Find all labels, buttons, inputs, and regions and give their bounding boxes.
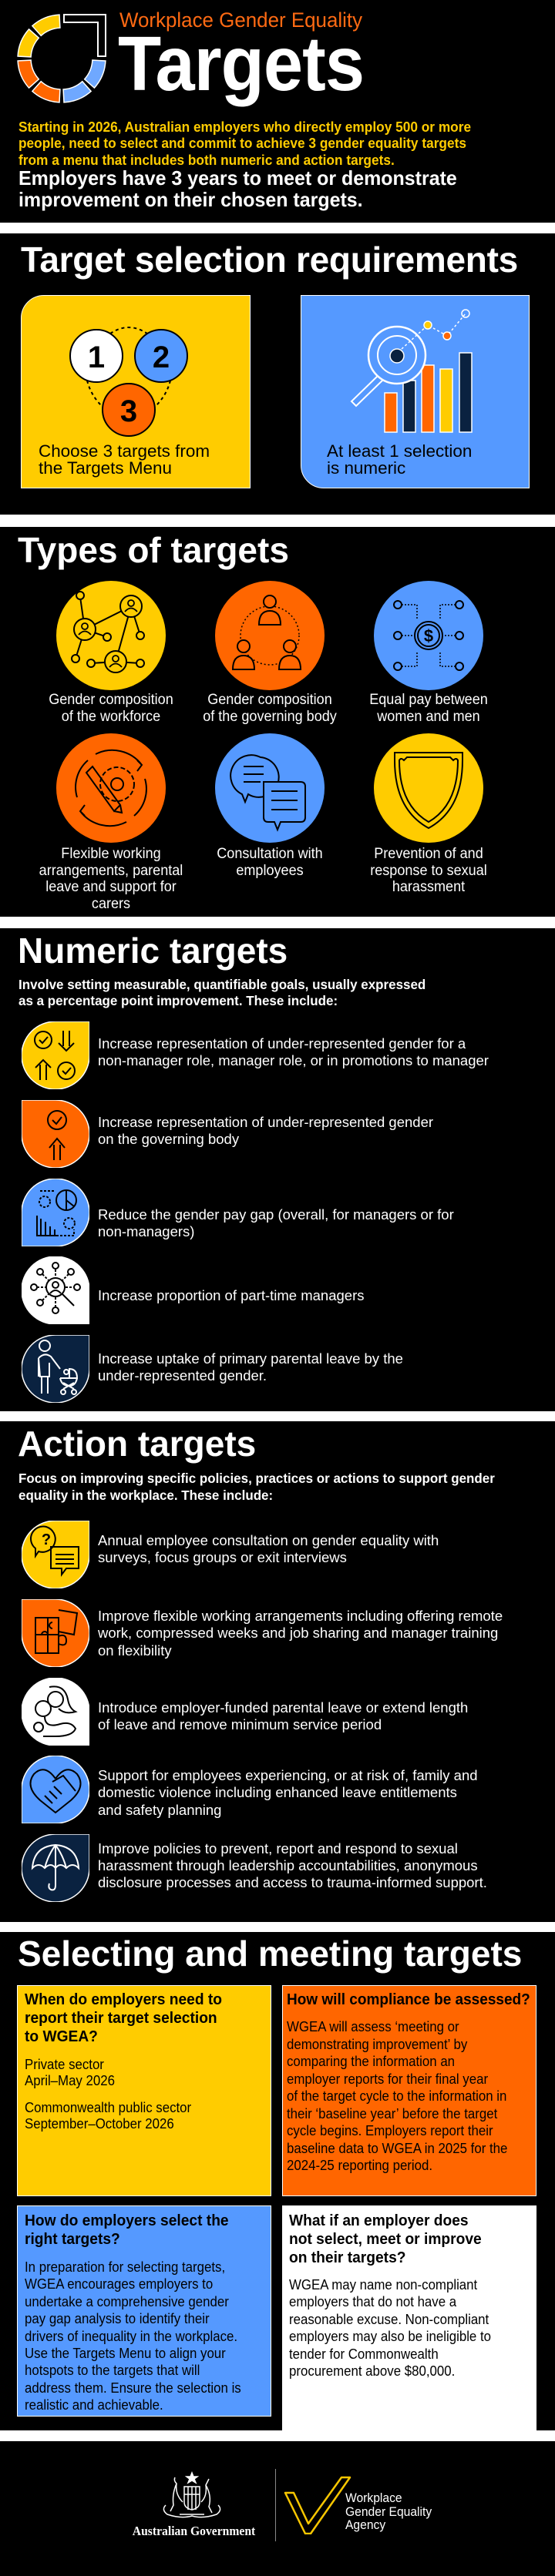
numeric item 3: non-managers) [98, 1223, 194, 1239]
numeric item 3 [22, 1179, 454, 1246]
icon: three numbered circles: 1 [88, 340, 105, 374]
box: non-compliance: procurement above $80,000. [289, 2363, 455, 2379]
icon: equal pay: $ [424, 626, 433, 646]
intro text yellow: from a menu that includes both numeric and action targets. [18, 153, 395, 168]
numeric item 1 [22, 1021, 489, 1089]
label: of the workforce [62, 709, 160, 725]
box: compliance: employer reports for their final year [287, 2071, 488, 2086]
footer: australian government logo: Australian Government [133, 2524, 255, 2538]
heading: action targets: Action targets [18, 1424, 256, 1464]
box: selecting right targets: hotspots to the targets that will [25, 2362, 200, 2378]
intro text yellow: people, need to select and commit to achieve 3 gender equality targets [18, 136, 466, 151]
label: Prevention of and [374, 846, 483, 862]
header logo: segmented ring [17, 14, 106, 103]
box: non-compliance: What if an employer does [289, 2212, 469, 2229]
label: response to sexual [370, 863, 487, 879]
numeric item 5 [22, 1335, 403, 1403]
box: selecting right targets: address them. Ensure the selection is [25, 2380, 241, 2396]
caption: Choose 3 targets from [39, 441, 210, 461]
action item 1: Annual employee consultation on gender equality with [98, 1532, 439, 1548]
numeric item 5: under-represented gender. [98, 1367, 267, 1384]
box: compliance: comparing the information an [287, 2053, 455, 2069]
icon: speech bubbles with question: ? [42, 1531, 51, 1548]
label: Consultation with [217, 846, 323, 862]
action item 3: of leave and remove minimum service period [98, 1716, 382, 1732]
box: non-compliance: reasonable excuse. Non-compliant [289, 2311, 489, 2327]
box: compliance: demonstrating improvement’ by [287, 2035, 467, 2052]
label: carers [92, 896, 130, 912]
footer: australian government logo [127, 2471, 258, 2542]
box: non-compliance: tender for Commonwealth [289, 2346, 439, 2362]
caption: the Targets Menu [39, 458, 172, 478]
icon: speech bubbles with question [22, 1521, 89, 1588]
box: non-compliance: WGEA may name non-compliant [289, 2276, 477, 2293]
action item 1: surveys, focus groups or exit interviews [98, 1549, 347, 1565]
action item 3 [22, 1678, 468, 1746]
label: leave and support for [45, 879, 177, 895]
box: non-compliance: employers may also be ineligible to [289, 2328, 491, 2344]
intro statement white: Employers have 3 years to meet or demonstrate [18, 166, 457, 190]
footer: WGEA logo [284, 2476, 438, 2534]
numeric item 5: Increase uptake of primary parental leave by the [98, 1350, 403, 1367]
label: Flexible working [61, 846, 161, 862]
divider [275, 2469, 276, 2541]
box: selecting right targets: realistic and achievable. [25, 2397, 163, 2413]
numeric item 4 [22, 1256, 365, 1324]
caption [39, 441, 210, 478]
icon: parent and child [22, 1678, 89, 1746]
numeric item 2: on the governing body [98, 1131, 239, 1147]
label: employees [236, 863, 304, 879]
box: when to report: April–May 2026 [25, 2072, 115, 2088]
label [39, 846, 183, 912]
panel: at least 1 numeric [301, 295, 530, 488]
label: Equal pay between [369, 692, 488, 708]
heading: types of targets: Types of targets [18, 530, 289, 570]
action item 5 [0, 1834, 555, 1902]
numeric intro: Involve setting measurable, quantifiable goals, usually expressed [18, 977, 426, 992]
label [369, 692, 488, 725]
label [217, 846, 323, 879]
box: selecting right targets: Use the Targets Menu to align your [25, 2345, 226, 2361]
footer: WGEA logo: Workplace [345, 2490, 402, 2505]
box: when to report: When do employers need to [25, 1991, 222, 2008]
action item 5: disclosure processes and access to trauma-informed support. [98, 1874, 487, 1890]
box: non-compliance: not select, meet or improve [289, 2231, 482, 2248]
icon: heart handshake [22, 1756, 89, 1823]
icon: magnifier and bar chart [350, 309, 473, 433]
label [49, 692, 173, 725]
box: selecting right targets: drivers of inequality in the workplace. [25, 2328, 237, 2344]
box: when to report: Commonwealth public sector [25, 2099, 191, 2115]
box: compliance: baseline data to WGEA in 2025 for the [287, 2140, 507, 2155]
box: when to report: to WGEA? [25, 2028, 98, 2045]
action item 1 [22, 1521, 439, 1588]
box: compliance: How will compliance be assessed? [287, 1991, 530, 2008]
box: selecting right targets: How do employers select the [25, 2212, 229, 2229]
box: selecting right targets: WGEA encourages employers to [25, 2276, 213, 2292]
icon: puzzle [22, 1599, 89, 1667]
box: when to report: September–October 2026 [25, 2115, 174, 2132]
box: when to report: Private sector [25, 2056, 104, 2072]
action item 4: Support for employees experiencing, or at risk of, family and [98, 1767, 478, 1783]
intro statement white [18, 166, 457, 211]
intro text yellow [18, 119, 471, 168]
box: compliance [282, 1985, 536, 2196]
action item 2: Improve flexible working arrangements including offering remote [98, 1608, 503, 1624]
box: compliance: 2024-25 reporting period. [287, 2157, 432, 2173]
action item 5: Improve policies to prevent, report and respond to sexual [98, 1840, 458, 1857]
caption [327, 441, 472, 478]
label: harassment [392, 879, 465, 895]
icon: pay gap charts [22, 1179, 89, 1246]
header kicker: Workplace Gender Equality [119, 8, 362, 32]
action item 5: harassment through leadership accountabilities, anonymous [98, 1857, 478, 1873]
label [370, 846, 487, 895]
icon: parent with stroller [22, 1335, 89, 1403]
heading: numeric targets: Numeric targets [18, 931, 288, 971]
footer: WGEA logo: Gender Equality [345, 2504, 432, 2519]
box: non-compliance [282, 2205, 536, 2430]
box: selecting right targets: undertake a comprehensive gender [25, 2293, 229, 2309]
label: Gender composition [49, 692, 173, 708]
action item 4 [22, 1756, 478, 1823]
box: compliance: their ‘baseline year’ before the target [287, 2105, 497, 2122]
action item 2 [22, 1599, 503, 1667]
icon: coat of arms [158, 2471, 227, 2522]
icon: check and arrow [22, 1100, 89, 1168]
box: selecting right targets: In preparation for selecting targets, [25, 2259, 225, 2275]
intro text yellow: Starting in 2026, Australian employers who directly employ 500 or more [18, 119, 471, 135]
box: compliance: of the target cycle to the information in [287, 2088, 506, 2104]
icon: magnifier network [22, 1256, 89, 1324]
icon: governing body [215, 581, 325, 690]
caption: is numeric [327, 458, 405, 478]
footer: WGEA logo: Agency [345, 2517, 385, 2532]
icon: yellow check [284, 2476, 353, 2534]
label: women and men [377, 709, 480, 725]
action item 3: Introduce employer-funded parental leave or extend length [98, 1699, 468, 1716]
action item 2: on flexibility [98, 1642, 172, 1659]
header title: Targets [118, 21, 364, 107]
icon: umbrella [22, 1834, 89, 1902]
heading: target selection requirements: Target selection requirements [21, 240, 518, 280]
panel: choose 3 targets [21, 295, 251, 488]
box: selecting right targets: pay gap analysis to identify their [25, 2310, 210, 2326]
numeric item 1: Increase representation of under-represented gender for a [98, 1035, 466, 1052]
label: of the governing body [203, 709, 337, 725]
label: arrangements, parental [39, 863, 183, 879]
box: compliance: cycle begins. Employers report their [287, 2122, 493, 2138]
box: when to report: report their target selection [25, 2010, 217, 2027]
box: selecting right targets: right targets? [25, 2231, 120, 2248]
icon: checks and arrows [22, 1021, 89, 1089]
icon: three numbered circles: 2 [153, 340, 170, 374]
label: Gender composition [207, 692, 332, 708]
numeric item 3: Reduce the gender pay gap (overall, for managers or for [98, 1206, 454, 1223]
box: compliance: WGEA will assess ‘meeting or [287, 2018, 459, 2034]
heading: selecting and meeting targets: Selecting and meeting targets [18, 1934, 522, 1974]
numeric item 2: Increase representation of under-represented gender [98, 1114, 433, 1130]
icon: workforce composition [56, 581, 166, 690]
icon: three numbered circles [69, 327, 188, 437]
intro statement white: improvement on their chosen targets. [18, 188, 363, 211]
numeric intro: as a percentage point improvement. These include: [18, 993, 338, 1008]
box: when to report [17, 1985, 271, 2196]
numeric item 2 [22, 1100, 433, 1168]
caption: At least 1 selection [327, 441, 472, 461]
action intro: Focus on improving specific policies, practices or actions to support gender [18, 1471, 495, 1486]
numeric item 4: Increase proportion of part-time managers [98, 1287, 365, 1303]
action item 4: domestic violence including enhanced leave entitlements [98, 1784, 457, 1800]
box: non-compliance: on their targets? [289, 2249, 405, 2266]
icon: shield [374, 733, 483, 843]
icon: flexible working [56, 733, 166, 843]
numeric item 1: non-manager role, manager role, or in promotions to manager [98, 1052, 489, 1068]
icon: consultation [215, 733, 325, 843]
icon: three numbered circles: 3 [120, 394, 137, 428]
box: selecting right targets [17, 2205, 271, 2417]
action item 2: work, compressed weeks and job sharing and manager training [98, 1625, 498, 1641]
icon: equal pay [374, 581, 483, 690]
action intro [18, 1471, 495, 1503]
numeric intro [18, 977, 426, 1008]
action intro: equality in the workplace. These include: [18, 1488, 273, 1503]
label [203, 692, 337, 725]
action item 4: and safety planning [98, 1802, 221, 1818]
box: non-compliance: employers that do not have a [289, 2293, 456, 2309]
